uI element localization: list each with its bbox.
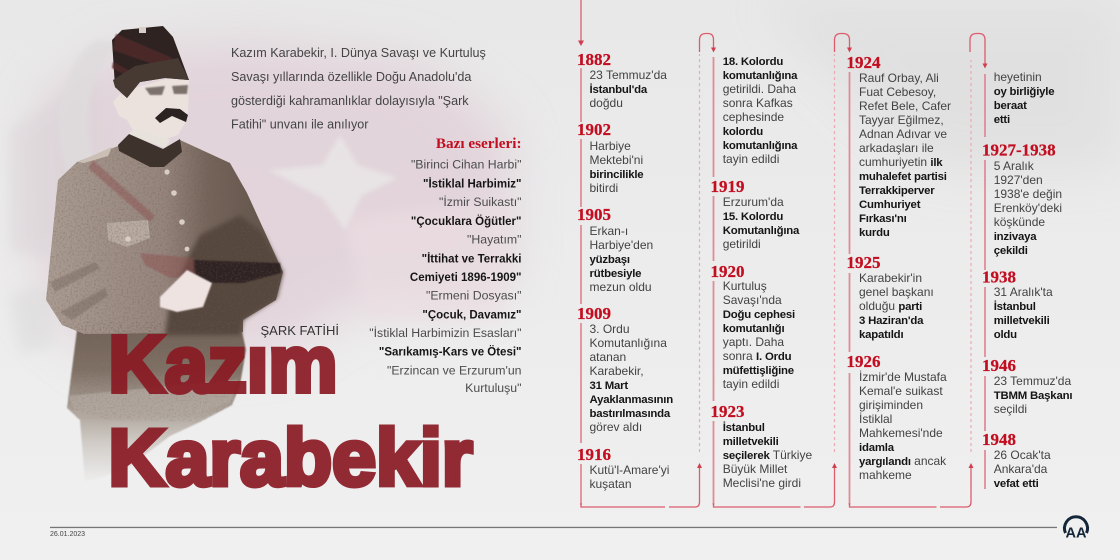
moustache	[155, 108, 188, 123]
1926 continued	[985, 70, 1054, 137]
jacket	[46, 140, 283, 334]
1902	[577, 120, 643, 207]
1948: Ankara'da	[994, 462, 1048, 476]
red tint on jacket	[88, 160, 196, 278]
works titles: "İzmir Suikastı"	[439, 195, 522, 209]
shoulder strap	[78, 147, 112, 163]
1926: 1926	[846, 352, 880, 371]
1919: 15. Kolordu	[723, 211, 783, 223]
subtitle: ŞARK FATİHİ	[260, 323, 339, 338]
main title	[108, 320, 472, 502]
1920: müfettişliğine	[723, 365, 794, 377]
1905: 1905	[577, 205, 611, 224]
intro text: gösterdiği kahramanlıklar dolayısıyla "Şark	[231, 94, 469, 108]
1923: İstanbul	[723, 421, 765, 434]
1923: 1923	[710, 402, 744, 421]
1916 continued: 18. Kolordu	[723, 56, 783, 68]
1916	[577, 445, 669, 505]
1916 continued: kolordu	[723, 126, 763, 138]
1916 continued: cephesinde	[723, 110, 784, 124]
dark band	[193, 260, 281, 283]
white shirt collar	[128, 128, 170, 148]
1926 continued: beraat	[994, 100, 1027, 112]
1902: bitirdi	[590, 181, 618, 195]
1926 continued: oy birliğiyle	[994, 86, 1054, 98]
timeline column 2	[710, 34, 852, 507]
1924: muhalefet partisi	[859, 171, 947, 183]
works list	[369, 135, 522, 395]
1938: İstanbul	[994, 300, 1036, 313]
main title: Kazım	[108, 320, 338, 408]
1927-1938: Erenköy'deki	[994, 201, 1062, 215]
1924: 1924	[846, 53, 881, 72]
face and ear	[113, 78, 189, 141]
1946: seçildi	[994, 402, 1027, 416]
date: 26.01.2023	[50, 531, 85, 538]
1927-1938: 1927-1938	[982, 140, 1056, 160]
1909: Ayaklanmasının	[590, 394, 673, 406]
1905: mezun oldu	[590, 280, 652, 294]
1882: İstanbul'da	[590, 83, 648, 96]
1920: Savaşı'nda	[723, 293, 782, 307]
1927-1938: 1938'e değin	[994, 187, 1062, 201]
intro text: Fatihi" unvanı ile anılıyor	[231, 118, 368, 132]
connector to column 2	[581, 34, 716, 507]
1927-1938: inzivaya	[994, 231, 1037, 243]
main title: Karabekir	[108, 413, 472, 502]
1920: Kurtuluş	[723, 279, 767, 293]
1924: kurdu	[859, 227, 890, 239]
1920: Doğu cephesi	[723, 309, 795, 321]
1926 continued: etti	[994, 114, 1010, 126]
1926: Mahkemesi'nde	[859, 426, 943, 440]
1909: atanan	[590, 350, 626, 364]
works titles: "Sarıkamış-Kars ve Ötesi"	[379, 346, 522, 358]
1925: kapatıldı	[859, 329, 903, 341]
1924: Cumhuriyet	[859, 199, 921, 211]
1905: Harbiye'den	[590, 238, 653, 252]
1946	[982, 356, 1072, 431]
1926: İzmir'de Mustafa	[859, 370, 947, 384]
1923	[710, 402, 812, 505]
1927-1938: 5 Aralık	[994, 159, 1035, 173]
works titles	[369, 158, 522, 395]
1916: kuşatan	[590, 477, 632, 491]
flag watercolor wash	[10, 40, 510, 365]
timeline column 3	[846, 34, 988, 507]
1926: girişiminden	[859, 398, 923, 412]
1926 continued: heyetinin	[994, 70, 1042, 84]
1916: Kutü'l-Amare'yi	[590, 463, 669, 477]
eye shadows	[145, 85, 188, 95]
1920: yaptı. Daha	[723, 335, 784, 349]
works titles: Kurtuluşu"	[465, 381, 522, 395]
1924: arkadaşları ile	[859, 141, 934, 155]
1927-1938: çekildi	[994, 245, 1028, 257]
1882: doğdu	[590, 96, 623, 110]
jacket grain	[46, 140, 283, 334]
1938: 31 Aralık'ta	[994, 285, 1053, 299]
1916 continued: komutanlığına	[723, 70, 798, 82]
hand	[160, 270, 212, 312]
1920: komutanlığı	[723, 323, 784, 335]
1920: 1920	[710, 262, 744, 281]
1925: 1925	[846, 253, 880, 272]
1905: yüzbaşı	[590, 254, 630, 266]
1916 continued: tayin edildi	[723, 152, 779, 166]
works titles: "Erzincan ve Erzurum'un	[387, 363, 522, 377]
crescent in wash	[58, 40, 270, 310]
1924	[846, 53, 951, 254]
1926	[846, 352, 947, 505]
1948	[982, 430, 1051, 490]
works titles: "Birinci Cihan Harbi"	[411, 158, 522, 172]
works heading: Bazı eserleri:	[436, 135, 522, 152]
1923: Meclisi'ne girdi	[723, 476, 801, 490]
1924: cumhuriyetin ilk	[859, 155, 943, 169]
1916 continued	[714, 56, 798, 177]
1919: Erzurum'da	[723, 195, 784, 209]
timeline column 4	[982, 70, 1072, 490]
sleeve creases	[50, 262, 108, 320]
1905	[577, 205, 653, 304]
1924: Tayyar Eğilmez,	[859, 113, 944, 127]
1925: genel başkanı	[859, 285, 934, 299]
1902: birincilikle	[590, 169, 643, 181]
1909: 3. Ordu	[590, 322, 630, 336]
1902: Mektebi'ni	[590, 153, 643, 167]
1946: 1946	[982, 356, 1016, 375]
1924: Rauf Orbay, Ali	[859, 71, 939, 85]
1938: 1938	[982, 268, 1016, 286]
1916: 1916	[577, 445, 611, 464]
1905: rütbesiyle	[590, 268, 641, 280]
intro text: Savaşı yıllarında özellikle Doğu Anadolu'da	[231, 70, 471, 84]
1909: bastırılmasında	[590, 408, 671, 420]
star in wash	[268, 135, 398, 230]
1919	[710, 177, 800, 261]
1925	[846, 253, 934, 352]
dark uniform collar	[118, 134, 182, 167]
1920: sonra I. Ordu	[723, 349, 792, 363]
1909	[577, 304, 673, 443]
works titles: "Çocuklara Öğütler"	[411, 215, 522, 228]
connector to column 3	[714, 34, 852, 507]
timeline column 1	[577, 0, 716, 507]
works titles: "Ermeni Dosyası"	[426, 288, 522, 302]
buttons	[125, 169, 189, 251]
1902: 1902	[577, 120, 611, 139]
1920	[710, 262, 795, 401]
1938: oldu	[994, 329, 1017, 341]
1925: olduğu parti	[859, 299, 922, 313]
1927-1938: 1927'den	[994, 173, 1043, 187]
1916 continued: komutanlığına	[723, 140, 798, 152]
icon: AA logo	[1064, 517, 1088, 542]
1924: Terrakkiperver	[859, 185, 935, 197]
1926: Kemal'e suikast	[859, 384, 943, 398]
1924: Fuat Cebesoy,	[859, 85, 936, 99]
works titles: "Hayatım"	[467, 232, 522, 246]
lower coat grain	[67, 322, 246, 422]
intro text	[231, 46, 486, 132]
1948: vefat etti	[994, 478, 1039, 490]
1924: Fırkası'nı	[859, 213, 907, 225]
1938	[982, 268, 1053, 357]
works titles: "İttihat ve Terrakki	[422, 252, 522, 265]
1909: 1909	[577, 304, 611, 323]
1905: Erkan-ı	[590, 224, 628, 238]
connector to column 4	[850, 34, 988, 507]
1902: Harbiye	[590, 139, 631, 153]
1927-1938	[982, 140, 1062, 270]
portrait of Kazım Karabekir	[46, 26, 283, 482]
footer rule	[50, 527, 1057, 528]
1882: 1882	[577, 50, 611, 69]
icon: AA logo: AA	[1066, 524, 1087, 542]
works titles: Cemiyeti 1896-1909"	[410, 272, 522, 284]
fez hat	[112, 26, 189, 98]
entry arrow	[578, 0, 584, 46]
1926: yargılandı ancak	[859, 454, 947, 468]
1923: Büyük Millet	[723, 462, 788, 476]
1919: 1919	[710, 177, 744, 196]
1909: Komutanlığına	[590, 336, 667, 350]
1923: milletvekili	[723, 436, 779, 448]
lower coat fading out	[67, 322, 246, 482]
1926: İstiklal	[859, 412, 892, 426]
1946: 23 Temmuz'da	[994, 374, 1071, 388]
1882	[577, 50, 667, 122]
1925: 3 Haziran'da	[859, 315, 924, 327]
1920: tayin edildi	[723, 377, 779, 391]
1926: idamla	[859, 442, 895, 454]
works titles: "Çocuk, Davamız"	[422, 309, 522, 321]
1919: Komutanlığına	[723, 225, 800, 237]
1909: görev aldı	[590, 420, 642, 434]
1946: TBMM Başkanı	[994, 390, 1072, 402]
dark sleeve area	[165, 215, 283, 335]
1919: getirildi	[723, 237, 761, 251]
1948: 26 Ocak'ta	[994, 448, 1051, 462]
pocket flap	[107, 220, 150, 247]
1926: mahkeme	[859, 468, 912, 482]
1909: Karabekir,	[590, 364, 644, 378]
works titles: "İstiklal Harbimizin Esasları"	[369, 326, 522, 340]
1909: 31 Mart	[590, 380, 628, 392]
1882: 23 Temmuz'da	[590, 68, 667, 82]
1948: 1948	[982, 430, 1016, 449]
1924: Adnan Adıvar ve	[859, 127, 947, 141]
1916 continued: getirildi. Daha	[723, 82, 796, 96]
1938: milletvekili	[994, 315, 1050, 327]
1916 continued: sonra Kafkas	[723, 96, 793, 110]
1923: seçilerek Türkiye	[723, 448, 812, 462]
intro text: Kazım Karabekir, I. Dünya Savaşı ve Kurtuluş	[231, 46, 486, 60]
1925: Karabekir'in	[859, 271, 922, 285]
1924: Refet Bele, Cafer	[859, 99, 951, 113]
1927-1938: köşkünde	[994, 215, 1045, 229]
works titles: "İstiklal Harbimiz"	[423, 177, 522, 190]
